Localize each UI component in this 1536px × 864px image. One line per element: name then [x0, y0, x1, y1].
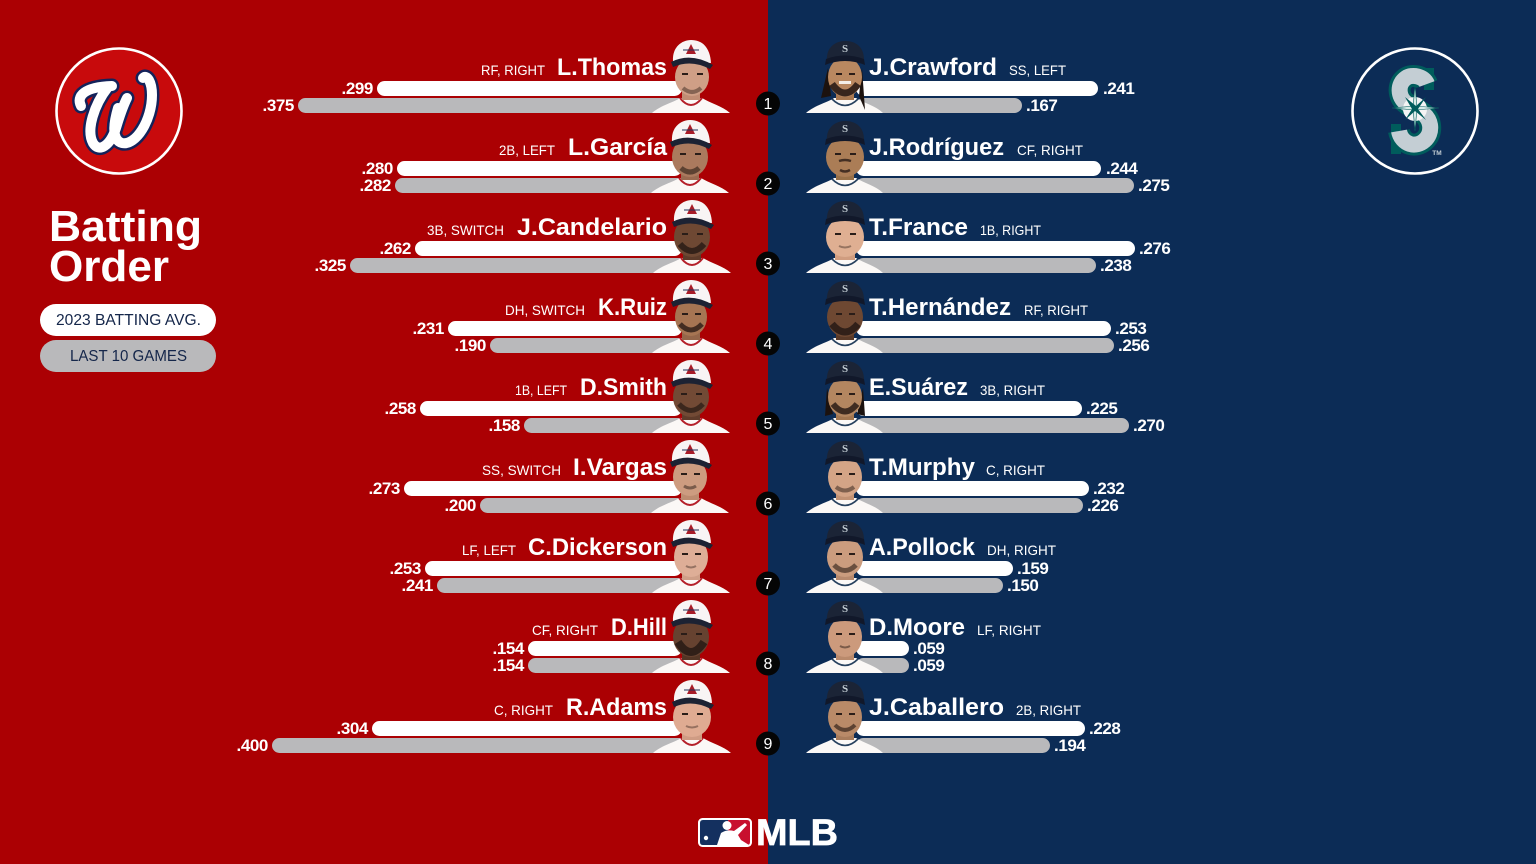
Nationals row 3: J.Candelario: .262 — [380, 239, 411, 258]
batting order badge 7 — [756, 572, 780, 596]
batting order badge 2: 2 — [764, 176, 773, 193]
Mariners row 4: T.Hernández: S — [842, 283, 848, 295]
Mariners row 3: T.France — [806, 201, 1170, 275]
Mariners row 1: J.Crawford: J.Crawford — [869, 54, 997, 81]
legend: last 10 games — [40, 340, 216, 372]
Nationals row 1: L.Thomas: .299 — [342, 79, 373, 98]
Nationals row 5: D.Smith: D.Smith — [580, 374, 667, 401]
batting order badge 2 — [756, 172, 780, 196]
Mariners row 9: J.Caballero: .228 — [1089, 719, 1120, 738]
Mariners row 3: T.France: T.France — [869, 214, 968, 241]
batting order badge 4: 4 — [764, 336, 773, 353]
Nationals row 2: L.García: .280 — [362, 159, 393, 178]
Mariners row 4: T.Hernández: .253 — [1115, 319, 1146, 338]
Mariners row 4: T.Hernández: .256 — [1118, 336, 1150, 355]
Mariners row 8: D.Moore: LF, RIGHT — [977, 622, 1041, 638]
Nationals row 8: D.Hill — [492, 600, 730, 675]
batting order badge 8 — [756, 652, 780, 676]
Nationals row 4: K.Ruiz: .190 — [454, 336, 486, 355]
Mariners row 1: J.Crawford: .167 — [1026, 96, 1058, 115]
Mariners row 9: J.Caballero — [806, 681, 1120, 755]
Mariners row 5: E.Suárez: 3B, RIGHT — [980, 382, 1045, 398]
batting order badge 6 — [756, 492, 780, 516]
Mariners row 4: T.Hernández — [806, 281, 1150, 355]
Mariners row 8: D.Moore — [806, 601, 1041, 675]
Mariners row 8: D.Moore: .059 — [913, 639, 944, 658]
Nationals row 5: D.Smith: 1B, LEFT — [515, 382, 567, 398]
Mariners row 3: T.France: S — [842, 203, 848, 215]
Mariners row 2: J.Rodríguez: .275 — [1138, 176, 1170, 195]
batting order badge 3 — [756, 252, 780, 276]
Nationals row 7: C.Dickerson: C.Dickerson — [528, 534, 667, 561]
Mariners row 5: E.Suárez: .270 — [1133, 416, 1164, 435]
Mariners row 8: D.Moore: S — [842, 603, 848, 615]
icon: MLB batter logo — [698, 818, 752, 847]
Nationals row 7: C.Dickerson — [390, 520, 730, 595]
Mariners row 8: D.Moore: D.Moore — [869, 614, 965, 641]
Nationals row 1: L.Thomas: .375 — [262, 96, 294, 115]
Mariners row 5: E.Suárez — [806, 361, 1164, 435]
MLB wordmark: MLB — [756, 812, 838, 853]
Mariners row 8: D.Moore: .059 — [913, 656, 944, 675]
title — [49, 202, 202, 291]
Mariners row 7: A.Pollock: S — [842, 523, 848, 535]
Mariners row 7: A.Pollock — [806, 521, 1056, 595]
Mariners row 2: J.Rodríguez: CF, RIGHT — [1017, 142, 1083, 158]
Mariners row 1: J.Crawford: S — [842, 43, 848, 55]
Mariners row 2: J.Rodríguez: S — [842, 123, 848, 135]
Nationals row 2: L.García — [360, 120, 729, 195]
Nationals row 7: C.Dickerson: .241 — [402, 576, 433, 595]
Mariners row 5: E.Suárez: S — [842, 363, 848, 375]
Mariners row 2: J.Rodríguez — [806, 121, 1170, 195]
Mariners row 3: T.France: .238 — [1100, 256, 1132, 275]
batting order badge 5: 5 — [764, 416, 773, 433]
batting order badge 8: 8 — [764, 656, 773, 673]
Mariners row 9: J.Caballero: J.Caballero — [869, 694, 1004, 721]
Nationals row 1: L.Thomas: L.Thomas — [557, 54, 667, 81]
Nationals row 7: C.Dickerson: LF, LEFT — [462, 542, 516, 558]
batting order badge 7: 7 — [764, 576, 773, 593]
Nationals row 6: I.Vargas — [368, 440, 729, 515]
Mariners row 1: J.Crawford: SS, LEFT — [1009, 62, 1066, 78]
Nationals row 3: J.Candelario: J.Candelario — [517, 214, 667, 241]
Mariners row 6: T.Murphy — [806, 441, 1124, 515]
Nationals row 3: J.Candelario — [314, 200, 731, 275]
Mariners row 3: T.France: .276 — [1139, 239, 1170, 258]
Nationals row 9: R.Adams — [236, 680, 731, 755]
Nationals row 8: D.Hill: D.Hill — [611, 614, 667, 641]
batting order badge 4 — [756, 332, 780, 356]
Nationals row 8: D.Hill: CF, RIGHT — [532, 622, 598, 638]
Nationals row 1: L.Thomas: RF, RIGHT — [481, 62, 545, 78]
background: Nationals red half — [0, 0, 768, 864]
Nationals row 6: I.Vargas: .200 — [444, 496, 476, 515]
Nationals row 5: D.Smith: .158 — [488, 416, 520, 435]
Mariners row 6: T.Murphy: .226 — [1087, 496, 1118, 515]
batting order badge 5 — [756, 412, 780, 436]
Mariners row 7: A.Pollock: DH, RIGHT — [987, 542, 1056, 558]
Mariners row 7: A.Pollock: .150 — [1007, 576, 1038, 595]
Mariners row 2: J.Rodríguez: J.Rodríguez — [869, 134, 1004, 161]
batting order badge 1: 1 — [764, 96, 773, 113]
Mariners row 9: J.Caballero: 2B, RIGHT — [1016, 702, 1081, 718]
Nationals row 4: K.Ruiz: .231 — [412, 319, 444, 338]
Mariners row 1: J.Crawford: .241 — [1103, 79, 1134, 98]
Nationals row 3: J.Candelario: 3B, SWITCH — [427, 222, 504, 238]
Nationals row 8: D.Hill: .154 — [492, 656, 525, 675]
Nationals row 9: R.Adams: R.Adams — [566, 694, 667, 721]
legend: 2023 batting average: 2023 BATTING AVG. — [56, 312, 201, 329]
Mariners row 9: J.Caballero: S — [842, 683, 848, 695]
Mariners row 6: T.Murphy: S — [842, 443, 848, 455]
Nationals row 6: I.Vargas: I.Vargas — [573, 454, 667, 481]
Mariners row 6: T.Murphy: .232 — [1093, 479, 1124, 498]
Nationals row 9: R.Adams: .400 — [236, 736, 268, 755]
Nationals row 7: C.Dickerson: .253 — [390, 559, 421, 578]
Nationals row 5: D.Smith: .258 — [384, 399, 416, 418]
legend: 2023 batting average — [40, 304, 216, 336]
background: Mariners navy half — [768, 0, 1536, 864]
Mariners row 1: J.Crawford — [806, 41, 1134, 115]
Mariners row 3: T.France: 1B, RIGHT — [980, 222, 1041, 238]
Mariners row 4: T.Hernández: RF, RIGHT — [1024, 302, 1088, 318]
Nationals row 9: R.Adams: .304 — [336, 719, 369, 738]
batting order badge 6: 6 — [764, 496, 773, 513]
Nationals row 4: K.Ruiz — [412, 280, 730, 355]
Nationals row 2: L.García: .282 — [360, 176, 391, 195]
Nationals row 6: I.Vargas: .273 — [368, 479, 400, 498]
logo: Washington Nationals — [56, 48, 182, 174]
Mariners row 9: J.Caballero: .194 — [1054, 736, 1086, 755]
title: Batting — [49, 202, 202, 251]
Mariners row 7: A.Pollock: A.Pollock — [869, 534, 975, 561]
legend: last 10 games: LAST 10 GAMES — [70, 348, 187, 365]
Nationals row 6: I.Vargas: SS, SWITCH — [482, 462, 561, 478]
Nationals row 8: D.Hill: .154 — [492, 639, 525, 658]
Nationals row 4: K.Ruiz: K.Ruiz — [598, 294, 667, 321]
Mariners row 4: T.Hernández: T.Hernández — [869, 294, 1011, 321]
Mariners row 5: E.Suárez: E.Suárez — [869, 374, 968, 401]
batting order badge 1 — [756, 92, 780, 116]
Nationals row 5: D.Smith — [384, 360, 730, 435]
Mariners row 6: T.Murphy: T.Murphy — [869, 454, 975, 481]
Nationals row 2: L.García: L.García — [568, 134, 667, 161]
batting order badge 3: 3 — [764, 256, 773, 273]
Mariners row 6: T.Murphy: C, RIGHT — [986, 462, 1045, 478]
logo: Seattle Mariners — [1352, 48, 1478, 174]
logo: Seattle Mariners: TM — [1432, 150, 1442, 157]
batting order badge 9 — [756, 732, 780, 756]
Mariners row 5: E.Suárez: .225 — [1086, 399, 1118, 418]
title: Order — [49, 242, 169, 291]
Nationals row 1: L.Thomas — [262, 40, 730, 115]
Mariners row 2: J.Rodríguez: .244 — [1106, 159, 1138, 178]
Nationals row 2: L.García: 2B, LEFT — [499, 142, 555, 158]
Nationals row 4: K.Ruiz: DH, SWITCH — [505, 302, 585, 318]
batting order badge 9: 9 — [764, 736, 773, 753]
Mariners row 7: A.Pollock: .159 — [1017, 559, 1048, 578]
Nationals row 3: J.Candelario: .325 — [314, 256, 346, 275]
Nationals row 9: R.Adams: C, RIGHT — [494, 702, 553, 718]
